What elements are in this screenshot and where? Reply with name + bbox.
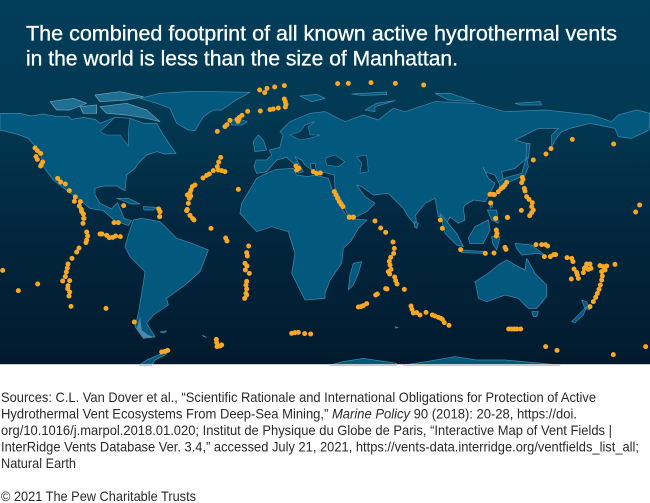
sources text block: org/10.1016/j.marpol.2018.01.020; Institut de Physique du Globe de Paris, “Interactive Map of Vent Fields | — [1, 422, 612, 438]
title — [26, 23, 617, 70]
vents: northeast quadrant — [334, 83, 640, 218]
land masses — [0, 92, 650, 365]
sources text block: Hydrothermal Vent Ecosystems From Deep-Sea Mining,” Marine Policy 90 (2018): 20-28, https://doi. — [1, 406, 577, 422]
Greenland — [140, 92, 250, 131]
panel: map background — [0, 0, 650, 364]
islands — [348, 143, 590, 323]
title: The combined footprint of all known active hydrothermal vents — [26, 23, 617, 46]
vents: southwest quadrant — [3, 211, 311, 352]
title: in the world is less than the size of Manhattan. — [26, 47, 458, 70]
South America — [125, 218, 208, 338]
vents: southeast quadrant — [349, 217, 646, 355]
Australia — [475, 258, 547, 308]
Eurasia — [254, 102, 650, 240]
map bottom edge line — [0, 364, 650, 365]
sources text block: Sources: C.L. Van Dover et al., “Scientific Rationale and International Obligations for Protection of Active — [1, 389, 596, 405]
Antarctica — [139, 350, 560, 365]
Patagonia ice — [137, 317, 155, 338]
sources text block: Natural Earth — [1, 455, 76, 471]
Arctic islands — [50, 92, 160, 122]
Africa — [240, 168, 367, 300]
North America — [0, 113, 176, 226]
sources text block — [1, 389, 639, 471]
hydrothermal vent locations — [3, 83, 646, 355]
vents: northwest quadrant — [35, 86, 320, 219]
world map — [0, 83, 650, 365]
inland seas — [100, 117, 368, 173]
